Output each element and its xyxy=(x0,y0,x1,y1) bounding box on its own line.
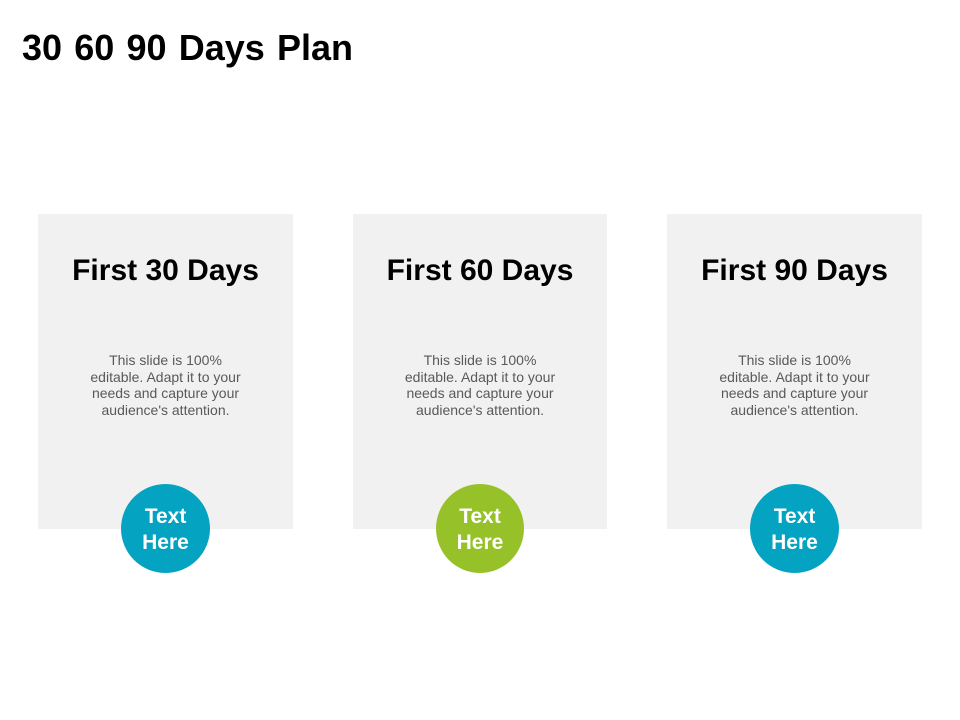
circle badge: first 60 days xyxy=(436,484,524,573)
text block: first 60 days: editable. Adapt it to your xyxy=(405,369,555,385)
circle badge: first 30 days xyxy=(121,484,210,573)
text block: first 90 days: editable. Adapt it to your xyxy=(719,369,870,385)
title: 30 60 90 Days Plan xyxy=(22,27,353,68)
text block: first 60 days: needs and capture your xyxy=(406,385,554,401)
text block: first 30 days: audience's attention. xyxy=(102,402,230,418)
heading: first 60 days: First 60 Days xyxy=(387,254,573,287)
circle badge: first 60 days: Text xyxy=(459,505,501,528)
text block: first 90 days: audience's attention. xyxy=(730,402,858,418)
text block: first 30 days: needs and capture your xyxy=(92,385,239,401)
circle badge: first 30 days: Here xyxy=(142,531,189,554)
text block: first 60 days: This slide is 100% xyxy=(424,352,536,368)
text block: first 30 days: editable. Adapt it to your xyxy=(90,369,241,385)
panel: first 90 days xyxy=(667,214,922,529)
circle badge: first 30 days: Text xyxy=(145,505,186,528)
circle badge: first 90 days: Here xyxy=(771,531,818,554)
circle badge: first 60 days: Here xyxy=(457,531,503,554)
text block: first 30 days: This slide is 100% xyxy=(109,352,222,368)
text block: first 60 days xyxy=(405,352,555,418)
heading: first 30 days: First 30 Days xyxy=(72,254,259,287)
text block: first 90 days xyxy=(719,352,870,418)
text block: first 30 days xyxy=(90,352,241,418)
panel: first 60 days xyxy=(353,214,607,529)
circle badge: first 90 days: Text xyxy=(774,505,815,528)
text block: first 90 days: This slide is 100% xyxy=(738,352,851,368)
circle badge: first 90 days xyxy=(750,484,839,573)
heading: first 90 days: First 90 Days xyxy=(701,254,888,287)
text block: first 90 days: needs and capture your xyxy=(721,385,868,401)
panel: first 30 days xyxy=(38,214,293,529)
text block: first 60 days: audience's attention. xyxy=(416,402,544,418)
